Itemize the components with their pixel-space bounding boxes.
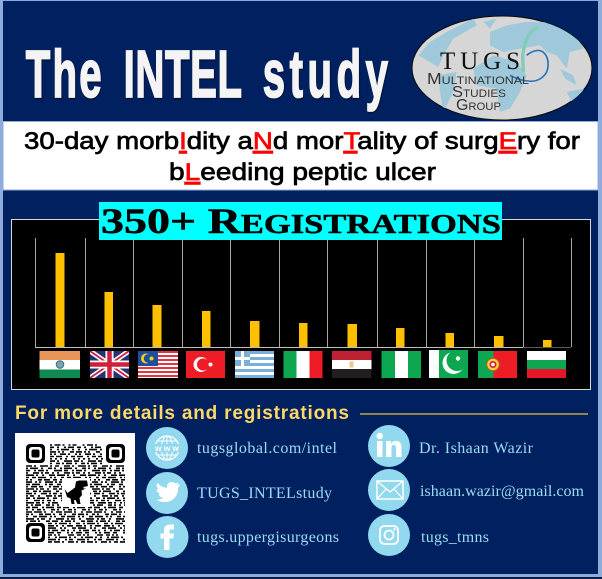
title: study [263, 36, 392, 112]
flag: Bulgaria [527, 351, 566, 378]
icon: email [368, 469, 410, 511]
flag: Turkey [186, 351, 225, 378]
flag: United Kingdom [90, 351, 129, 378]
QR finder patterns [26, 444, 125, 542]
contact: twitter handle: TUGS_INTELstudy [197, 485, 332, 502]
icon: dinosaur [62, 478, 90, 507]
contact: instagram handle: tugs_tmns [421, 529, 489, 546]
icon: Instagram [368, 514, 410, 556]
stomach mark [510, 27, 548, 81]
icon: website globe [146, 427, 188, 469]
section heading: more details: For more details and registrations [15, 403, 349, 424]
logo: TUGS Multinational Studies Group [412, 16, 592, 120]
logo: TUGS Multinational Studies Group: Studies [452, 84, 506, 101]
flag: Nigeria [382, 351, 421, 378]
logo wordmark: TUGS [440, 48, 520, 75]
flag: Egypt [332, 351, 372, 378]
flag: Pakistan [429, 350, 468, 378]
title: INTEL [124, 36, 243, 112]
logo: TUGS Multinational Studies Group: Multinational [427, 71, 529, 88]
bars by country [56, 253, 552, 347]
QR code [15, 433, 135, 553]
flag: Malaysia [138, 351, 178, 378]
contact: email address: ishaan.wazir@gmail.com [420, 483, 585, 500]
subtitle band: bLeeding peptic ulcer [169, 159, 436, 186]
contact: LinkedIn name: Dr. Ishaan Wazir [419, 440, 534, 457]
contact: facebook handle: tugs.uppergisurgeons [197, 529, 339, 546]
icon: website globe: www [154, 443, 179, 453]
icon: LinkedIn [368, 425, 410, 467]
grid lines [35, 238, 572, 348]
heading: 350+ Registrations: 350+ R egistrations [101, 199, 501, 242]
contact: website: tugsglobal.com/intel [197, 440, 338, 457]
logo: TUGS Multinational Studies Group: Group [456, 97, 501, 114]
flag: India [40, 351, 80, 378]
flag: Greece [235, 351, 274, 378]
title: The [26, 36, 104, 112]
QR modules [26, 445, 125, 542]
icon: Twitter [146, 472, 188, 514]
icon: Facebook [146, 516, 188, 558]
flag: Portugal [478, 351, 517, 378]
subtitle band: 30-day morb Idity a Nd mor Tality of surg Ery for [24, 128, 580, 155]
flag: Italy [284, 351, 322, 378]
bar chart panel [12, 220, 590, 390]
world map [418, 19, 585, 112]
subtitle band [3, 122, 598, 190]
